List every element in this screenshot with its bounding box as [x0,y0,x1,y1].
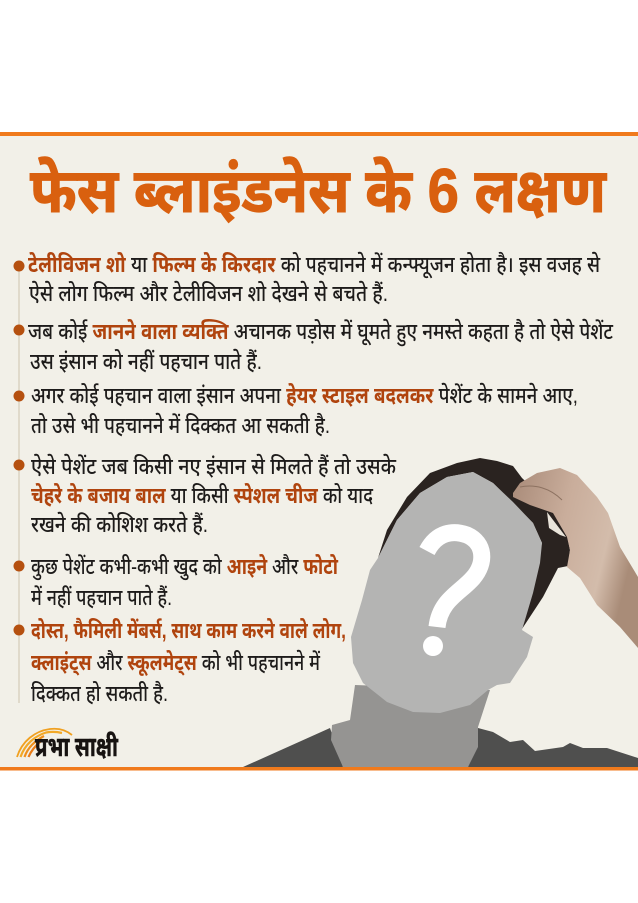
top orange rule [0,132,638,136]
neck [331,685,490,767]
symptom 6: क्लाइंट्स और स्कूलमेट्स को भी पहचानने में [31,649,321,677]
symptom 5 [31,553,338,610]
symptom 5: कुछ पेशेंट कभी-कभी खुद को आइने और फोटो [31,553,338,581]
symptom 1: ऐसे लोग फिल्म और टेलीविजन शो देखने से बचते हैं. [29,280,388,306]
symptom 6: दोस्त, फैमिली मेंबर्स, साथ काम करने वाले लोग, [31,617,346,643]
symptom 2 [28,318,614,374]
hair [378,458,570,632]
bullet timeline [14,260,24,703]
logo [17,729,119,762]
symptom 4 [31,453,397,537]
symptom 4: चेहरे के बजाय बाल या किसी स्पेशल चीज को याद [31,483,374,508]
symptom 4: ऐसे पेशेंट जब किसी नए इंसान से मिलते हैं तो उसके [31,453,397,479]
question mark [423,533,482,656]
symptom 2: उस इंसान को नहीं पहचान पाते हैं. [30,348,262,374]
symptom 3 [31,382,578,438]
symptom 1: टेलीविजन शो या फिल्म के किरदार को पहचानने में कन्फ्यूजन होता है। इस वजह से [28,251,601,279]
logo wordmark: प्रभा साक्षी [35,732,119,762]
symptom 5: में नहीं पहचान पाते हैं. [31,584,172,610]
shirt [243,728,638,767]
illustration: faceless man scratching head [243,458,638,767]
blank face [351,472,542,713]
logo arcs [17,729,72,757]
symptom 4: रखने की कोशिश करते हैं. [31,511,208,537]
background panel [0,135,638,768]
symptom 1 [28,251,601,306]
symptom 6: दिक्कत हो सकती है. [31,680,168,706]
symptom 6 [31,617,346,706]
gap between hair and hand [547,512,566,537]
bottom orange rule [0,767,638,770]
symptom 3: तो उसे भी पहचानने में दिक्कत आ सकती है. [31,412,330,438]
hand [513,468,638,648]
symptom 3: अगर कोई पहचान वाला इंसान अपना हेयर स्टाइल बदलकर पेशेंट के सामने आए, [31,382,578,408]
